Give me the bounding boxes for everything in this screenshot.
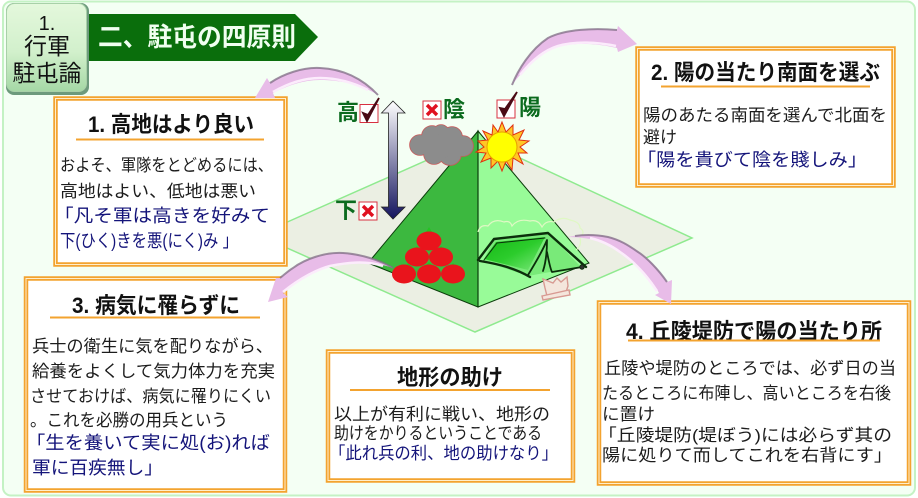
box 3 [26,278,285,490]
box 4 [598,302,909,484]
heading: 2. 陽の当たり南面を選ぶ [651,60,880,85]
box 5: terrain help [328,352,573,480]
body text: 兵士の衛生に気を配りながら、 [32,337,273,356]
title banner [86,14,318,61]
label: high with check: 高 [337,100,359,125]
body text [54,156,273,251]
icon: cloud [410,125,473,165]
body text: させておけば、病気に罹りにくい [30,387,271,406]
heading: 地形の助け [397,365,503,390]
body text: 下(ひく)きを悪(にく)み 」 [60,231,238,251]
ground plane [258,138,692,332]
label: low with cross [335,198,377,223]
body text: 以上が有利に戦い、地形の [334,405,550,424]
arrow: to box 1 [255,68,378,98]
pyramid hill [368,131,589,307]
title banner: 二、駐屯の四原則 [98,22,296,52]
label: high with check [337,98,379,125]
icon: tent [478,233,586,277]
heading: 3. 病気に罹らずに [72,293,240,318]
body text: 丘陵や堤防のところでは、必ず日の当 [604,359,896,378]
body text: 軍に百疾無し」 [32,458,163,478]
icon: smoke [478,218,583,250]
body text: およそ、軍隊をとどめるには、 [60,156,273,175]
body text: 「陽を貴びて陰を賤しみ」 [637,150,867,170]
body text [26,337,275,478]
body text: 給養をよくして気力体力を充実 [32,362,275,381]
icon: apples [392,227,465,284]
arrow: to box 4 [568,235,672,304]
body text: 。これを必勝の用兵という [30,411,228,430]
body text [598,359,896,465]
body text [637,106,887,170]
high-low arrow [382,101,405,219]
label: low with cross: 下 [335,198,357,223]
body text: たるところに布陣し、高いところを右後 [602,384,891,403]
body text: 陽に処りて而してこれを右背にす」 [602,446,892,465]
heading: 4. 丘陵堤防で陽の当たり所 [626,319,882,344]
box 1 [54,98,286,264]
arrow: to box 3 [268,253,393,302]
body text: 陽のあたる南面を選んで北面を [643,106,887,125]
badge: chapter label: 行軍 [24,33,70,59]
body text: 「丘陵堤防(堤ぼう)には必らず其の [598,426,892,445]
body text: 避け [643,128,677,147]
badge: chapter label: 駐屯論 [12,60,82,86]
label: sun side with check [497,92,541,120]
icon: campfire [542,277,570,300]
heading: 1. 高地はより良い [88,112,254,137]
body text: 助けをかりるということである [334,424,542,443]
body text: 「凡そ軍は高きを好みて [54,206,270,226]
body text: に置け [602,405,655,424]
label: sun side with check: 陽 [519,95,541,120]
body text: 高地はよい、低地は悪い [60,182,256,201]
body text [329,405,558,463]
badge: chapter label [6,3,89,95]
label: shade with cross: 陰 [443,97,465,122]
arrow: to box 2 [512,26,637,85]
terrain diagram [258,92,692,332]
box 2 [637,48,894,186]
body text: 「此れ兵の利、地の助けなり」 [329,444,558,463]
body text: 「生を養いて実に処(お)れば [26,433,270,453]
label: shade with cross [423,97,465,122]
badge: chapter label: 1. [39,13,55,35]
icon: sun [476,122,529,171]
